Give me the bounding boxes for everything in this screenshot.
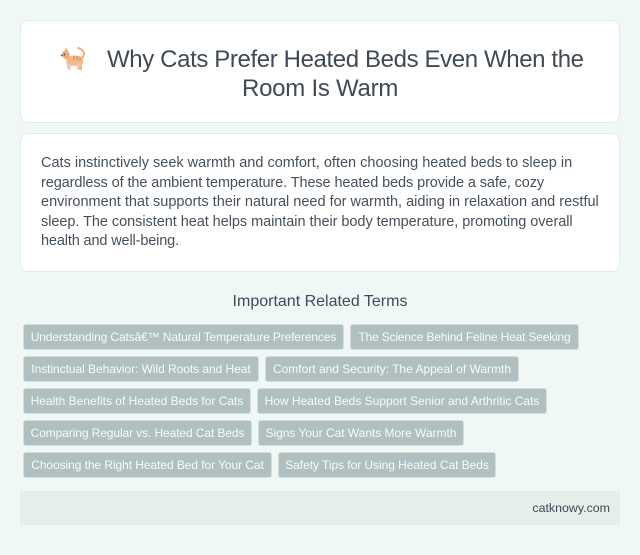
- tag: [23, 324, 344, 350]
- tag: Signs Your Cat Wants More Warmth: [266, 426, 456, 440]
- panel: description card: [20, 133, 620, 272]
- title: Why Cats Prefer Heated Beds Even When the: [107, 46, 584, 73]
- title: [107, 46, 584, 102]
- panel: title card: [20, 20, 620, 123]
- text block: description: sleep. The consistent heat helps maintain their body temperature, promoting overall: [41, 214, 573, 230]
- tag: [23, 420, 252, 446]
- tag: [265, 356, 519, 382]
- footer bar: [20, 491, 620, 525]
- tag: How Heated Beds Support Senior and Arthritic Cats: [265, 394, 539, 408]
- tag: [23, 388, 251, 414]
- tag: Understanding Catsâ€™ Natural Temperature Preferences: [31, 330, 336, 344]
- tag: The Science Behind Feline Heat Seeking: [359, 330, 570, 344]
- tag: Comparing Regular vs. Heated Cat Beds: [31, 426, 244, 440]
- tag: Instinctual Behavior: Wild Roots and Heat: [31, 362, 251, 376]
- tag list: [23, 324, 579, 478]
- text block: description: environment that supports their natural need for warmth, aiding in relaxation and restful: [41, 194, 599, 210]
- tag: Comfort and Security: The Appeal of Warmth: [273, 362, 511, 376]
- tag: [278, 452, 496, 478]
- tag: [258, 420, 464, 446]
- title: Room Is Warm: [242, 75, 398, 102]
- tag: [23, 356, 259, 382]
- heading: important related terms: Important Related Terms: [233, 293, 407, 310]
- text block: description: regardless of the ambient temperature. These heated beds provide a safe, cozy: [41, 175, 544, 191]
- text block: description: [41, 155, 599, 249]
- text block: description: health and well-being.: [41, 233, 179, 249]
- tag: [257, 388, 547, 414]
- tag: Health Benefits of Heated Beds for Cats: [31, 394, 243, 408]
- tag: [23, 452, 272, 478]
- text block: description: Cats instinctively seek warmth and comfort, often choosing heated beds to sleep in: [41, 155, 572, 171]
- footer text: site name: catknowy.com: [532, 501, 610, 515]
- icon: cat emoji: [60, 47, 85, 70]
- tag: Safety Tips for Using Heated Cat Beds: [285, 458, 489, 472]
- tag: [350, 324, 579, 350]
- tag: Choosing the Right Heated Bed for Your Cat: [31, 458, 264, 472]
